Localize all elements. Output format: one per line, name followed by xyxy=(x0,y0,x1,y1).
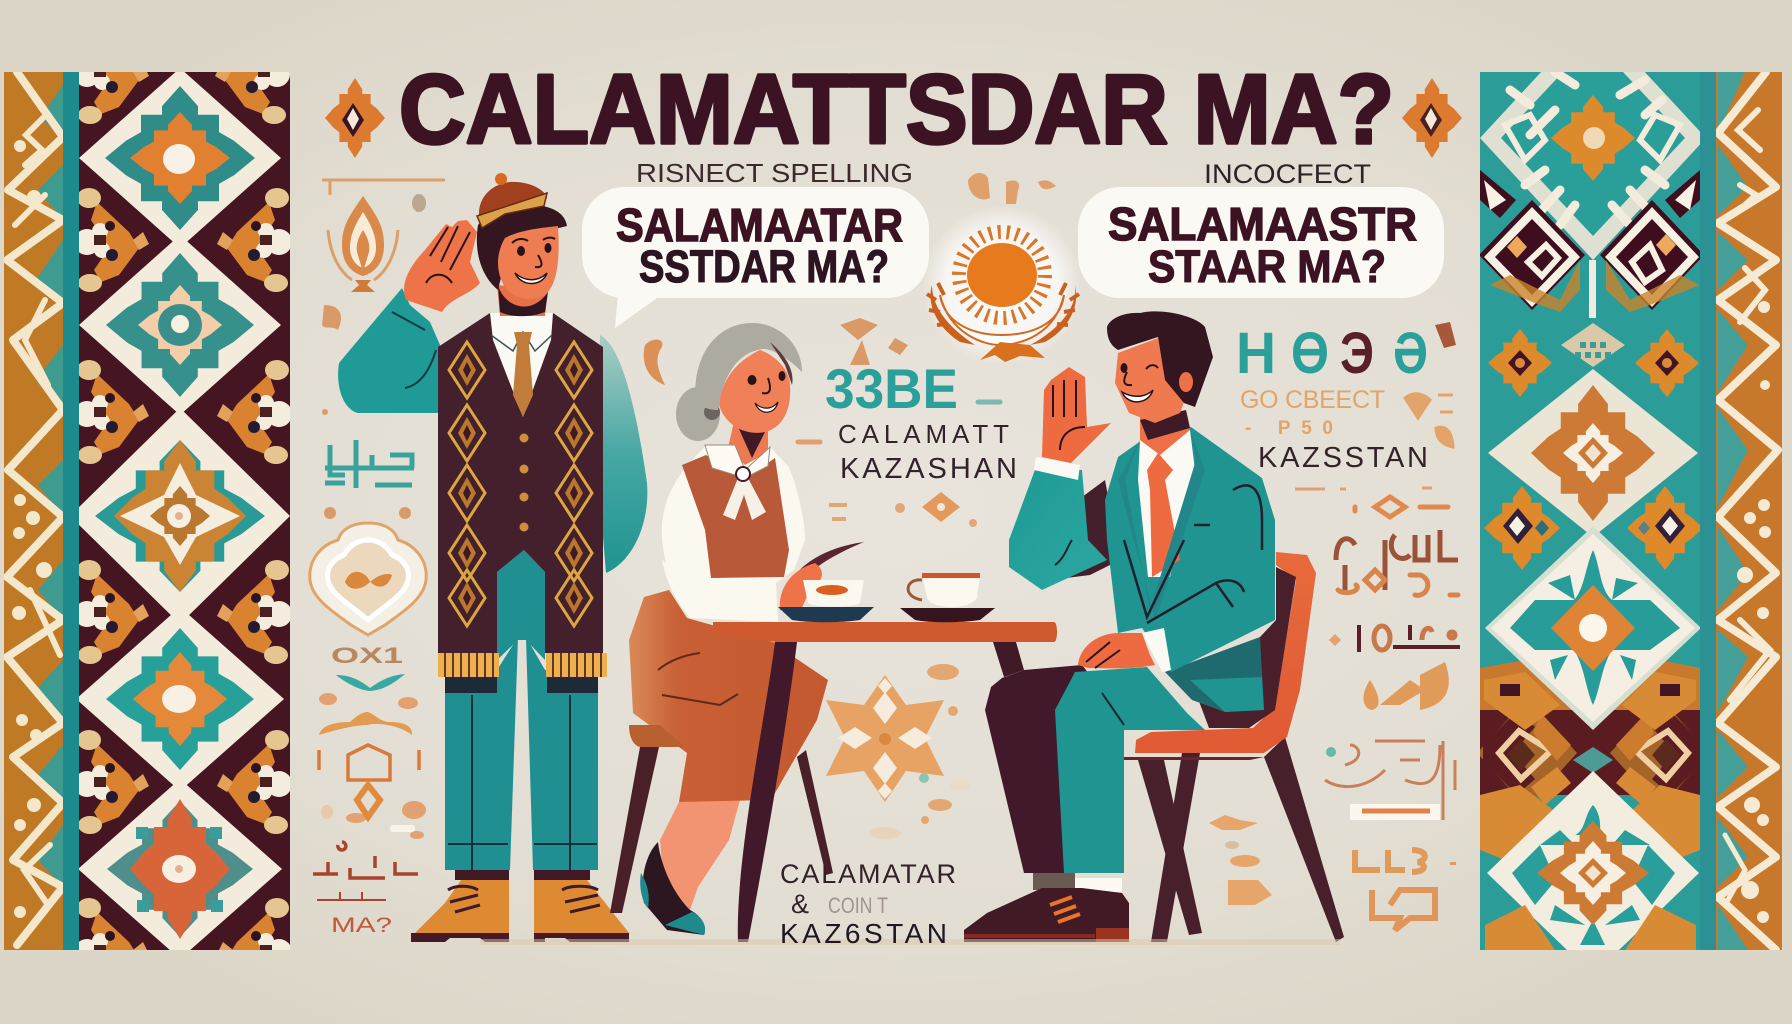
neck xyxy=(1140,415,1190,455)
faded word: COIN T xyxy=(828,893,888,918)
left teal stripe xyxy=(63,72,79,950)
speech bubble: left xyxy=(582,187,929,328)
stool leg xyxy=(610,747,659,913)
neck xyxy=(497,285,548,316)
dark key squares xyxy=(1479,170,1704,310)
corner motifs xyxy=(79,72,290,950)
quatrefoil badge xyxy=(310,523,426,635)
teal glyphs 33B: 33BE xyxy=(825,357,958,420)
cuff xyxy=(1034,457,1080,480)
diamond motif 1 xyxy=(105,86,255,230)
vest buttons xyxy=(520,434,528,532)
neck shadow xyxy=(735,420,765,458)
sleeve fold xyxy=(392,312,436,388)
label: calamatt: CALAMATT xyxy=(838,419,1009,449)
shirt xyxy=(1138,430,1195,577)
collar xyxy=(491,332,552,351)
back hair xyxy=(477,205,567,290)
orange spots xyxy=(319,693,426,839)
label: calamatar bottom block xyxy=(780,859,956,949)
brown script row 1 xyxy=(1336,530,1458,590)
right teal stripe xyxy=(1700,72,1718,950)
eyes and nose xyxy=(1120,363,1158,385)
face xyxy=(1115,338,1191,423)
specks around rosette xyxy=(869,664,970,839)
label: incorrect: INCOCFECT xyxy=(1204,159,1371,189)
glyph 4: Ә xyxy=(1393,321,1428,386)
bubble text line 1: SALAMAATAR xyxy=(616,199,903,251)
shoe left xyxy=(411,880,509,942)
left diamond column xyxy=(79,72,290,950)
stool seat xyxy=(629,725,685,747)
trouser crease xyxy=(448,695,597,870)
column below chair xyxy=(1209,815,1272,905)
ring pendant xyxy=(357,785,380,817)
orange side motifs lower xyxy=(1484,486,1703,570)
flame emblem xyxy=(328,196,398,292)
script underline xyxy=(317,892,386,900)
jacket body xyxy=(1105,427,1275,672)
floor shadow xyxy=(480,939,1340,945)
raised arm xyxy=(1009,467,1107,590)
tie xyxy=(1147,453,1180,577)
rosette xyxy=(826,675,944,802)
sleeve overlap xyxy=(662,560,778,622)
glyph 2: Ө xyxy=(1291,321,1329,386)
hair back and bun xyxy=(676,323,802,441)
orange row 3 xyxy=(1363,662,1449,710)
icon: title ornament right xyxy=(1402,78,1462,158)
small glyph row: OX1 xyxy=(331,643,403,668)
cup with saucer: right xyxy=(900,573,995,622)
small motifs xyxy=(322,194,426,519)
jacket lower shadow xyxy=(1165,637,1264,712)
eyes and nose xyxy=(512,238,555,267)
jacket pocket flap xyxy=(1190,677,1264,712)
bottom cream diamond xyxy=(1485,771,1699,950)
hand on knee xyxy=(1078,633,1155,668)
far leg xyxy=(985,665,1110,873)
cream orange diamond xyxy=(1488,369,1698,537)
top ornaments xyxy=(968,173,1056,204)
blouse xyxy=(662,447,805,620)
label: kazsstan: KAZSSTAN xyxy=(1258,442,1428,474)
eyes and nose xyxy=(748,371,786,393)
right zigzag strip xyxy=(1716,72,1782,950)
teal bar xyxy=(978,400,1000,404)
teal chevron xyxy=(336,674,405,691)
top line ornament xyxy=(322,180,445,195)
woman smile xyxy=(755,402,778,412)
blobs near woman xyxy=(644,340,665,385)
striped ornament xyxy=(1435,322,1456,348)
title: CALAMATTSDAR MA? xyxy=(399,54,1394,164)
icon: sun emblem with eagle wings xyxy=(922,205,1082,365)
pseudo letters top xyxy=(1236,321,1428,386)
icon: title ornament left xyxy=(325,78,385,158)
diamond motif 2 xyxy=(106,253,254,397)
chair shell xyxy=(1135,552,1316,753)
ear xyxy=(1179,372,1193,392)
chair inner xyxy=(1191,567,1296,728)
neck shadow xyxy=(1140,410,1190,440)
teal glyphs xyxy=(325,440,414,488)
diamond motif 4 xyxy=(106,628,254,770)
ma text: MA? xyxy=(331,914,392,937)
orange side motifs upper xyxy=(1488,260,1700,397)
skirt xyxy=(629,590,828,802)
left zigzag strip xyxy=(4,72,65,950)
panel: right ornamental border xyxy=(1477,16,1782,975)
forearm and hand xyxy=(784,542,864,598)
leg right xyxy=(526,637,598,870)
orange sub row: - P50 xyxy=(1245,418,1333,439)
right diamond column xyxy=(1480,72,1700,950)
label: kazashan: KAZASHAN xyxy=(840,453,1017,485)
top right of woman xyxy=(840,318,908,365)
stool back leg xyxy=(797,750,833,875)
left table leg xyxy=(738,642,797,942)
upper trousers xyxy=(497,550,545,660)
figure: seated woman xyxy=(610,323,864,935)
lower leg xyxy=(660,800,740,910)
hat xyxy=(477,173,547,228)
bubble text line 2: SSTDAR MA? xyxy=(639,241,889,292)
chair legs xyxy=(1138,737,1344,942)
bars xyxy=(798,440,820,444)
center small teal diamond xyxy=(1573,747,1613,773)
glyph 3: Э xyxy=(1340,321,1374,386)
line 1: CALAMATAR xyxy=(780,859,956,889)
leg left xyxy=(445,637,518,870)
moustache ornament xyxy=(319,712,412,735)
lapels xyxy=(1118,430,1205,620)
fringe xyxy=(438,653,607,693)
figure: seated man in teal suit xyxy=(964,311,1344,942)
man smile xyxy=(1122,390,1153,402)
cup with saucer: left xyxy=(778,580,874,622)
script row 4 xyxy=(1325,741,1455,820)
glyph 1: Н xyxy=(1236,321,1276,386)
table top xyxy=(713,622,1057,642)
speech bubble: right xyxy=(1078,187,1444,298)
near leg xyxy=(1055,667,1205,873)
white sock xyxy=(1075,878,1122,892)
vest xyxy=(682,455,789,578)
shoe xyxy=(640,842,705,935)
orange row 1b xyxy=(1338,570,1458,595)
orange lines xyxy=(1295,488,1432,489)
shirt cuff xyxy=(1142,628,1171,672)
other arm sleeve xyxy=(600,335,647,573)
diamond motif 3 xyxy=(95,440,265,592)
script glyphs xyxy=(313,842,418,878)
face xyxy=(719,350,790,433)
bubble text line 2: STAAR MA? xyxy=(1148,241,1386,292)
small diamond ornament xyxy=(922,492,960,522)
orange bar xyxy=(1362,808,1430,814)
raised hand xyxy=(404,220,480,312)
decoration: centre ornaments xyxy=(644,173,1272,905)
orange blobs xyxy=(1405,394,1453,447)
skirt folds xyxy=(658,653,738,705)
ampersand: & xyxy=(791,889,809,919)
neck xyxy=(728,417,768,465)
decoration: left column ornaments xyxy=(310,180,445,937)
collar xyxy=(705,445,770,478)
label: correct orange: GO CBEECT xyxy=(1240,386,1385,414)
top cream diamond xyxy=(1480,72,1700,260)
orange row 5 xyxy=(1355,850,1453,872)
brown row 2 xyxy=(1359,625,1460,652)
motif row xyxy=(1355,497,1448,517)
panel: left ornamental border xyxy=(4,72,290,950)
white bar xyxy=(1350,804,1440,820)
chin beard xyxy=(498,285,548,316)
lattice band xyxy=(1477,660,1710,860)
shoe xyxy=(964,888,1129,942)
shoe right xyxy=(534,880,629,942)
right table leg xyxy=(993,642,1024,677)
figure: standing man in vest xyxy=(338,173,647,942)
vest embroidery xyxy=(449,342,592,626)
diamond motif 5 xyxy=(107,799,253,939)
teal cross diamond xyxy=(1485,526,1701,730)
small specks xyxy=(829,503,977,527)
vest xyxy=(438,313,603,653)
line 3: KAZ6STAN xyxy=(780,918,947,949)
raised arm sleeve xyxy=(338,288,440,413)
hair xyxy=(1107,311,1213,407)
orange row 2 xyxy=(1329,626,1455,650)
small teal speck xyxy=(1326,747,1336,757)
socks xyxy=(1033,873,1075,890)
shirt xyxy=(490,313,553,417)
raised hand xyxy=(1042,367,1111,463)
bubble text line 1: SALAMAASTR xyxy=(1108,198,1417,250)
ankles xyxy=(455,870,590,880)
seat underside xyxy=(1124,757,1264,760)
tie xyxy=(513,332,533,417)
cravat xyxy=(723,467,766,520)
smile xyxy=(515,273,547,284)
orange row 6 xyxy=(1372,890,1435,930)
face xyxy=(498,226,559,299)
decoration: right column ornaments xyxy=(1236,321,1460,930)
knee crease xyxy=(1102,693,1124,725)
inner shadow arm xyxy=(1050,480,1120,580)
elbow fold xyxy=(1055,540,1072,565)
label: correct spelling: RISNECT SPELLING xyxy=(636,158,913,188)
pentagon ornament xyxy=(319,745,419,780)
cream diamonds xyxy=(70,68,290,959)
